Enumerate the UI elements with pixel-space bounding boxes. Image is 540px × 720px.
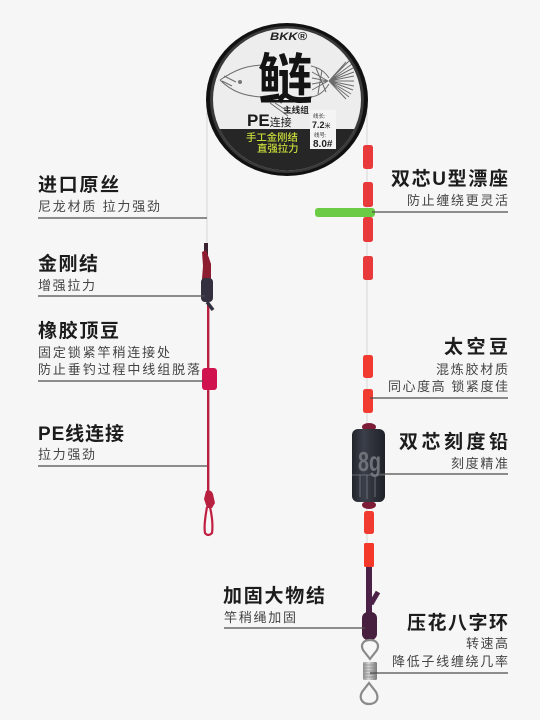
bottom ring — [361, 683, 377, 704]
callout: rubber stopper: 固定锁紧竿稍连接处 — [38, 345, 170, 360]
navy knot — [201, 278, 213, 302]
dark cord top — [204, 243, 208, 255]
callout: swivel: 转速高 — [466, 636, 508, 651]
callout: diamond knot: 增强拉力 — [38, 278, 95, 293]
left main line — [206, 110, 208, 244]
callout: rubber stopper: 防止垂钓过程中线组脱落 — [38, 362, 200, 377]
callout: space bean: 混炼胶材质 — [436, 362, 508, 377]
slogan line two: 直强拉力 — [257, 142, 299, 155]
PE connection: PE连接 — [247, 111, 292, 130]
left rig: PE connection cord — [201, 243, 217, 535]
spec: length: 线长: — [313, 112, 326, 120]
callout: diamond knot: 金刚结 — [38, 252, 98, 275]
callout: space bean — [370, 335, 508, 398]
callout: scale sinker: 刻度精准 — [451, 456, 508, 471]
end loop — [205, 507, 212, 535]
rolling swivel — [361, 640, 378, 704]
right main line — [366, 110, 368, 570]
callout: swivel — [370, 611, 508, 673]
rubber stopper — [202, 368, 217, 390]
end knot — [204, 490, 215, 508]
green U float seat — [315, 208, 375, 217]
callout: space bean: 同心度高 锁紧度佳 — [388, 379, 508, 394]
callout: PE line connection — [38, 423, 207, 466]
top ring — [362, 640, 378, 659]
callout: reinforced knot — [223, 585, 365, 628]
spool label disc — [206, 23, 368, 176]
spec: number: 线号: — [314, 131, 327, 139]
callout: rubber stopper — [38, 319, 203, 381]
subtitle: 主线组 — [283, 104, 309, 115]
spec: length value: 7.2米 — [312, 120, 331, 130]
callout: imported filament: 进口原丝 — [38, 174, 119, 196]
spec box — [310, 110, 336, 149]
purple reinforced cord and knot — [362, 567, 378, 640]
callout: space bean: 太空豆 — [444, 335, 508, 358]
double-core scale sinker — [352, 423, 385, 509]
right rig: float beads — [363, 145, 374, 567]
underline of character — [261, 100, 311, 102]
callout: U float seat: 防止缠绕更灵活 — [407, 193, 508, 208]
dark band — [220, 129, 354, 170]
product character: 鲢 — [258, 49, 313, 111]
callout: reinforced knot: 竿稍绳加固 — [224, 610, 296, 625]
spec: number value: 8.0# — [313, 139, 333, 150]
callout: U float seat: 双芯U型漂座 — [391, 167, 508, 190]
callout: imported filament: 尼龙材质 拉力强劲 — [38, 199, 160, 214]
callout: rubber stopper: 橡胶顶豆 — [38, 319, 119, 342]
barrel ribs — [363, 665, 377, 677]
slogan: 手工金刚结 — [246, 131, 298, 144]
callout: imported filament — [38, 174, 207, 218]
callout: reinforced knot: 加固大物结 — [223, 585, 325, 607]
red knot — [202, 250, 211, 279]
barrel — [363, 662, 377, 680]
callout: U float seat — [372, 167, 508, 212]
callout: diamond knot — [38, 252, 205, 296]
brand logo: BKK® — [270, 31, 308, 43]
callout: swivel: 降低子线缠绕几率 — [392, 654, 508, 669]
callout: scale sinker — [380, 430, 508, 474]
sinker weight marking: 8g — [358, 446, 381, 477]
callout: scale sinker: 双芯刻度铅 — [399, 430, 508, 453]
sinker scale — [352, 475, 385, 499]
callout: PE line connection: PE线连接 — [38, 423, 124, 445]
callout: PE line connection: 拉力强劲 — [38, 447, 95, 462]
fish illustration — [220, 60, 354, 116]
knot tag end — [207, 302, 213, 310]
callout: swivel: 压花八字环 — [407, 611, 508, 634]
